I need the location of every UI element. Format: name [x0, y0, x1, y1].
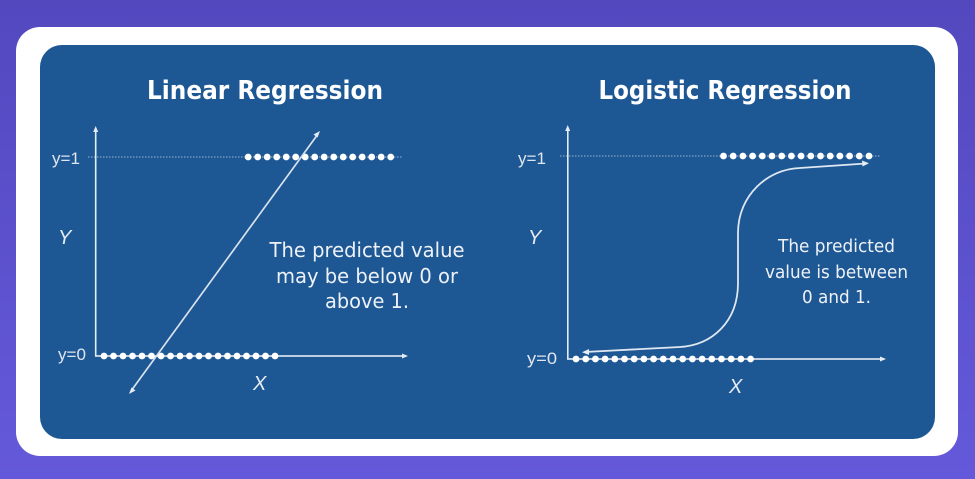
arrow: sigmoid curve — [582, 160, 869, 355]
labels: y=0 — [58, 345, 86, 364]
text: linear note — [269, 238, 464, 313]
labels: y=1 — [518, 149, 546, 168]
labels — [52, 149, 267, 395]
arrow: regression line — [129, 131, 320, 394]
text: logistic note: value is between — [765, 262, 908, 283]
text: logistic note: 0 and 1. — [802, 287, 871, 308]
labels: y=1 — [52, 149, 80, 168]
points y=0 — [101, 353, 278, 359]
points y=1 — [720, 153, 872, 159]
text: logistic note — [765, 236, 908, 308]
labels: X — [728, 376, 743, 398]
text: linear note: may be below 0 or — [276, 264, 459, 288]
labels: Y — [58, 227, 73, 249]
text: linear note: above 1. — [325, 289, 409, 313]
text: logistic note: The predicted — [777, 236, 895, 257]
dotted line y=1 — [88, 156, 402, 158]
dotted line y=1 — [560, 155, 880, 157]
chart: linear regression — [52, 126, 408, 395]
points y=0 — [573, 356, 754, 362]
axes — [565, 125, 886, 362]
labels — [518, 149, 743, 398]
text: linear note: The predicted value — [269, 238, 464, 262]
heading: Linear Regression: Linear Regression — [147, 76, 383, 106]
labels: X — [252, 373, 267, 395]
chart: logistic regression — [518, 125, 886, 398]
labels: y=0 — [527, 349, 557, 368]
panel: blue board — [40, 45, 935, 439]
axes — [93, 126, 408, 358]
labels: Y — [528, 227, 543, 249]
heading: Logistic Regression: Logistic Regression — [598, 76, 852, 106]
points y=1 — [245, 154, 394, 160]
